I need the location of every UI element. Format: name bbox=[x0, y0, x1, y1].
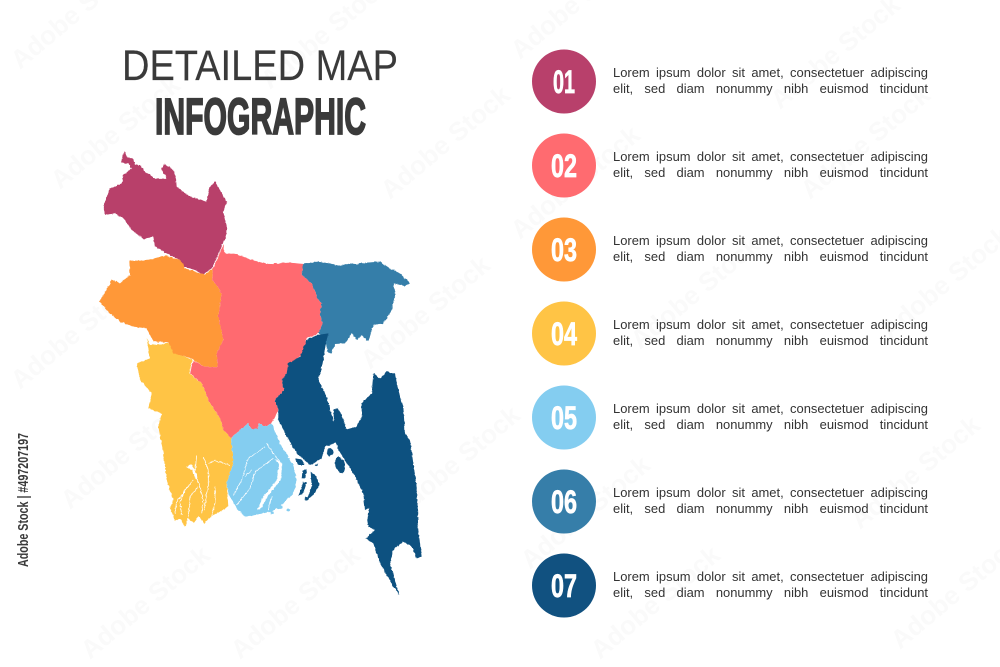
text block 02: Lorem ipsum dolor sit amet, consectetuer adipiscing bbox=[613, 149, 928, 164]
text: Adobe Stock bbox=[625, 229, 766, 355]
text: Adobe Stock bbox=[225, 539, 366, 665]
text block 06 bbox=[613, 485, 928, 516]
region 04: yellow bbox=[137, 338, 233, 527]
number badge 01 bbox=[532, 50, 596, 114]
text: Adobe Stock bbox=[515, 449, 656, 575]
text: Adobe Stock bbox=[375, 79, 516, 205]
text: Adobe Stock bbox=[505, 119, 646, 245]
number badge 04 bbox=[532, 302, 596, 366]
number badge 07: 07 bbox=[551, 568, 577, 604]
number badge 03 bbox=[532, 218, 596, 282]
text block 04: Lorem ipsum dolor sit amet, consectetuer adipiscing bbox=[613, 317, 928, 332]
region 07: dark blue bbox=[275, 333, 422, 595]
number badge 04: 04 bbox=[551, 316, 577, 352]
region 02: coral bbox=[190, 244, 323, 438]
text block 02 bbox=[613, 149, 928, 180]
text: Adobe Stock bbox=[5, 269, 146, 395]
number badge 05: 05 bbox=[551, 400, 577, 436]
region 03: orange bbox=[99, 256, 223, 367]
text: Adobe Stock bbox=[385, 399, 526, 525]
title: infographic: INFOGRAPHIC bbox=[155, 88, 366, 145]
text: Adobe Stock bbox=[45, 69, 186, 195]
number badge 06: 06 bbox=[551, 484, 577, 520]
text block 07: Lorem ipsum dolor sit amet, consectetuer adipiscing bbox=[613, 569, 928, 584]
number badge 03: 03 bbox=[551, 232, 577, 268]
text block 03: Lorem ipsum dolor sit amet, consectetuer adipiscing bbox=[613, 233, 928, 248]
text block 01: Lorem ipsum dolor sit amet, consectetuer adipiscing bbox=[613, 65, 928, 80]
number badge 05 bbox=[532, 386, 596, 450]
text: Adobe Stock bbox=[355, 249, 496, 375]
number badge 07 bbox=[532, 554, 596, 618]
number badge 02: 02 bbox=[551, 148, 577, 184]
text block 03: elit, sed diam nonummy nibh euismod tincidunt bbox=[613, 249, 928, 264]
text block 03 bbox=[613, 233, 928, 264]
text block 07: elit, sed diam nonummy nibh euismod tincidunt bbox=[613, 585, 928, 600]
text: Adobe Stock bbox=[55, 389, 196, 515]
text: Adobe Stock bbox=[75, 539, 216, 665]
region 05: light blue bbox=[227, 423, 297, 517]
text block 02: elit, sed diam nonummy nibh euismod tincidunt bbox=[613, 165, 928, 180]
text block 04: elit, sed diam nonummy nibh euismod tincidunt bbox=[613, 333, 928, 348]
text block 04 bbox=[613, 317, 928, 348]
text block 05 bbox=[613, 401, 928, 432]
text: Adobe Stock bbox=[585, 539, 726, 665]
text: Adobe Stock bbox=[795, 79, 936, 205]
text block 01: elit, sed diam nonummy nibh euismod tincidunt bbox=[613, 81, 928, 96]
map of Bangladesh bbox=[99, 151, 422, 595]
number badge 06 bbox=[532, 470, 596, 534]
text: Adobe Stock bbox=[845, 409, 986, 535]
text block 01 bbox=[613, 65, 928, 96]
text block 07 bbox=[613, 569, 928, 600]
text block 06: elit, sed diam nonummy nibh euismod tincidunt bbox=[613, 501, 928, 516]
title: detailed map: DETAILED MAP bbox=[122, 42, 398, 90]
text block 05: elit, sed diam nonummy nibh euismod tincidunt bbox=[613, 417, 928, 432]
region 06: blue bbox=[302, 262, 410, 353]
text block 05: Lorem ipsum dolor sit amet, consectetuer adipiscing bbox=[613, 401, 928, 416]
text block 06: Lorem ipsum dolor sit amet, consectetuer adipiscing bbox=[613, 485, 928, 500]
stock image id sidebar: Adobe Stock | #497207197 bbox=[15, 433, 32, 567]
number badge 02 bbox=[532, 134, 596, 198]
region 01: purple bbox=[103, 151, 227, 274]
number badge 01: 01 bbox=[553, 64, 575, 100]
